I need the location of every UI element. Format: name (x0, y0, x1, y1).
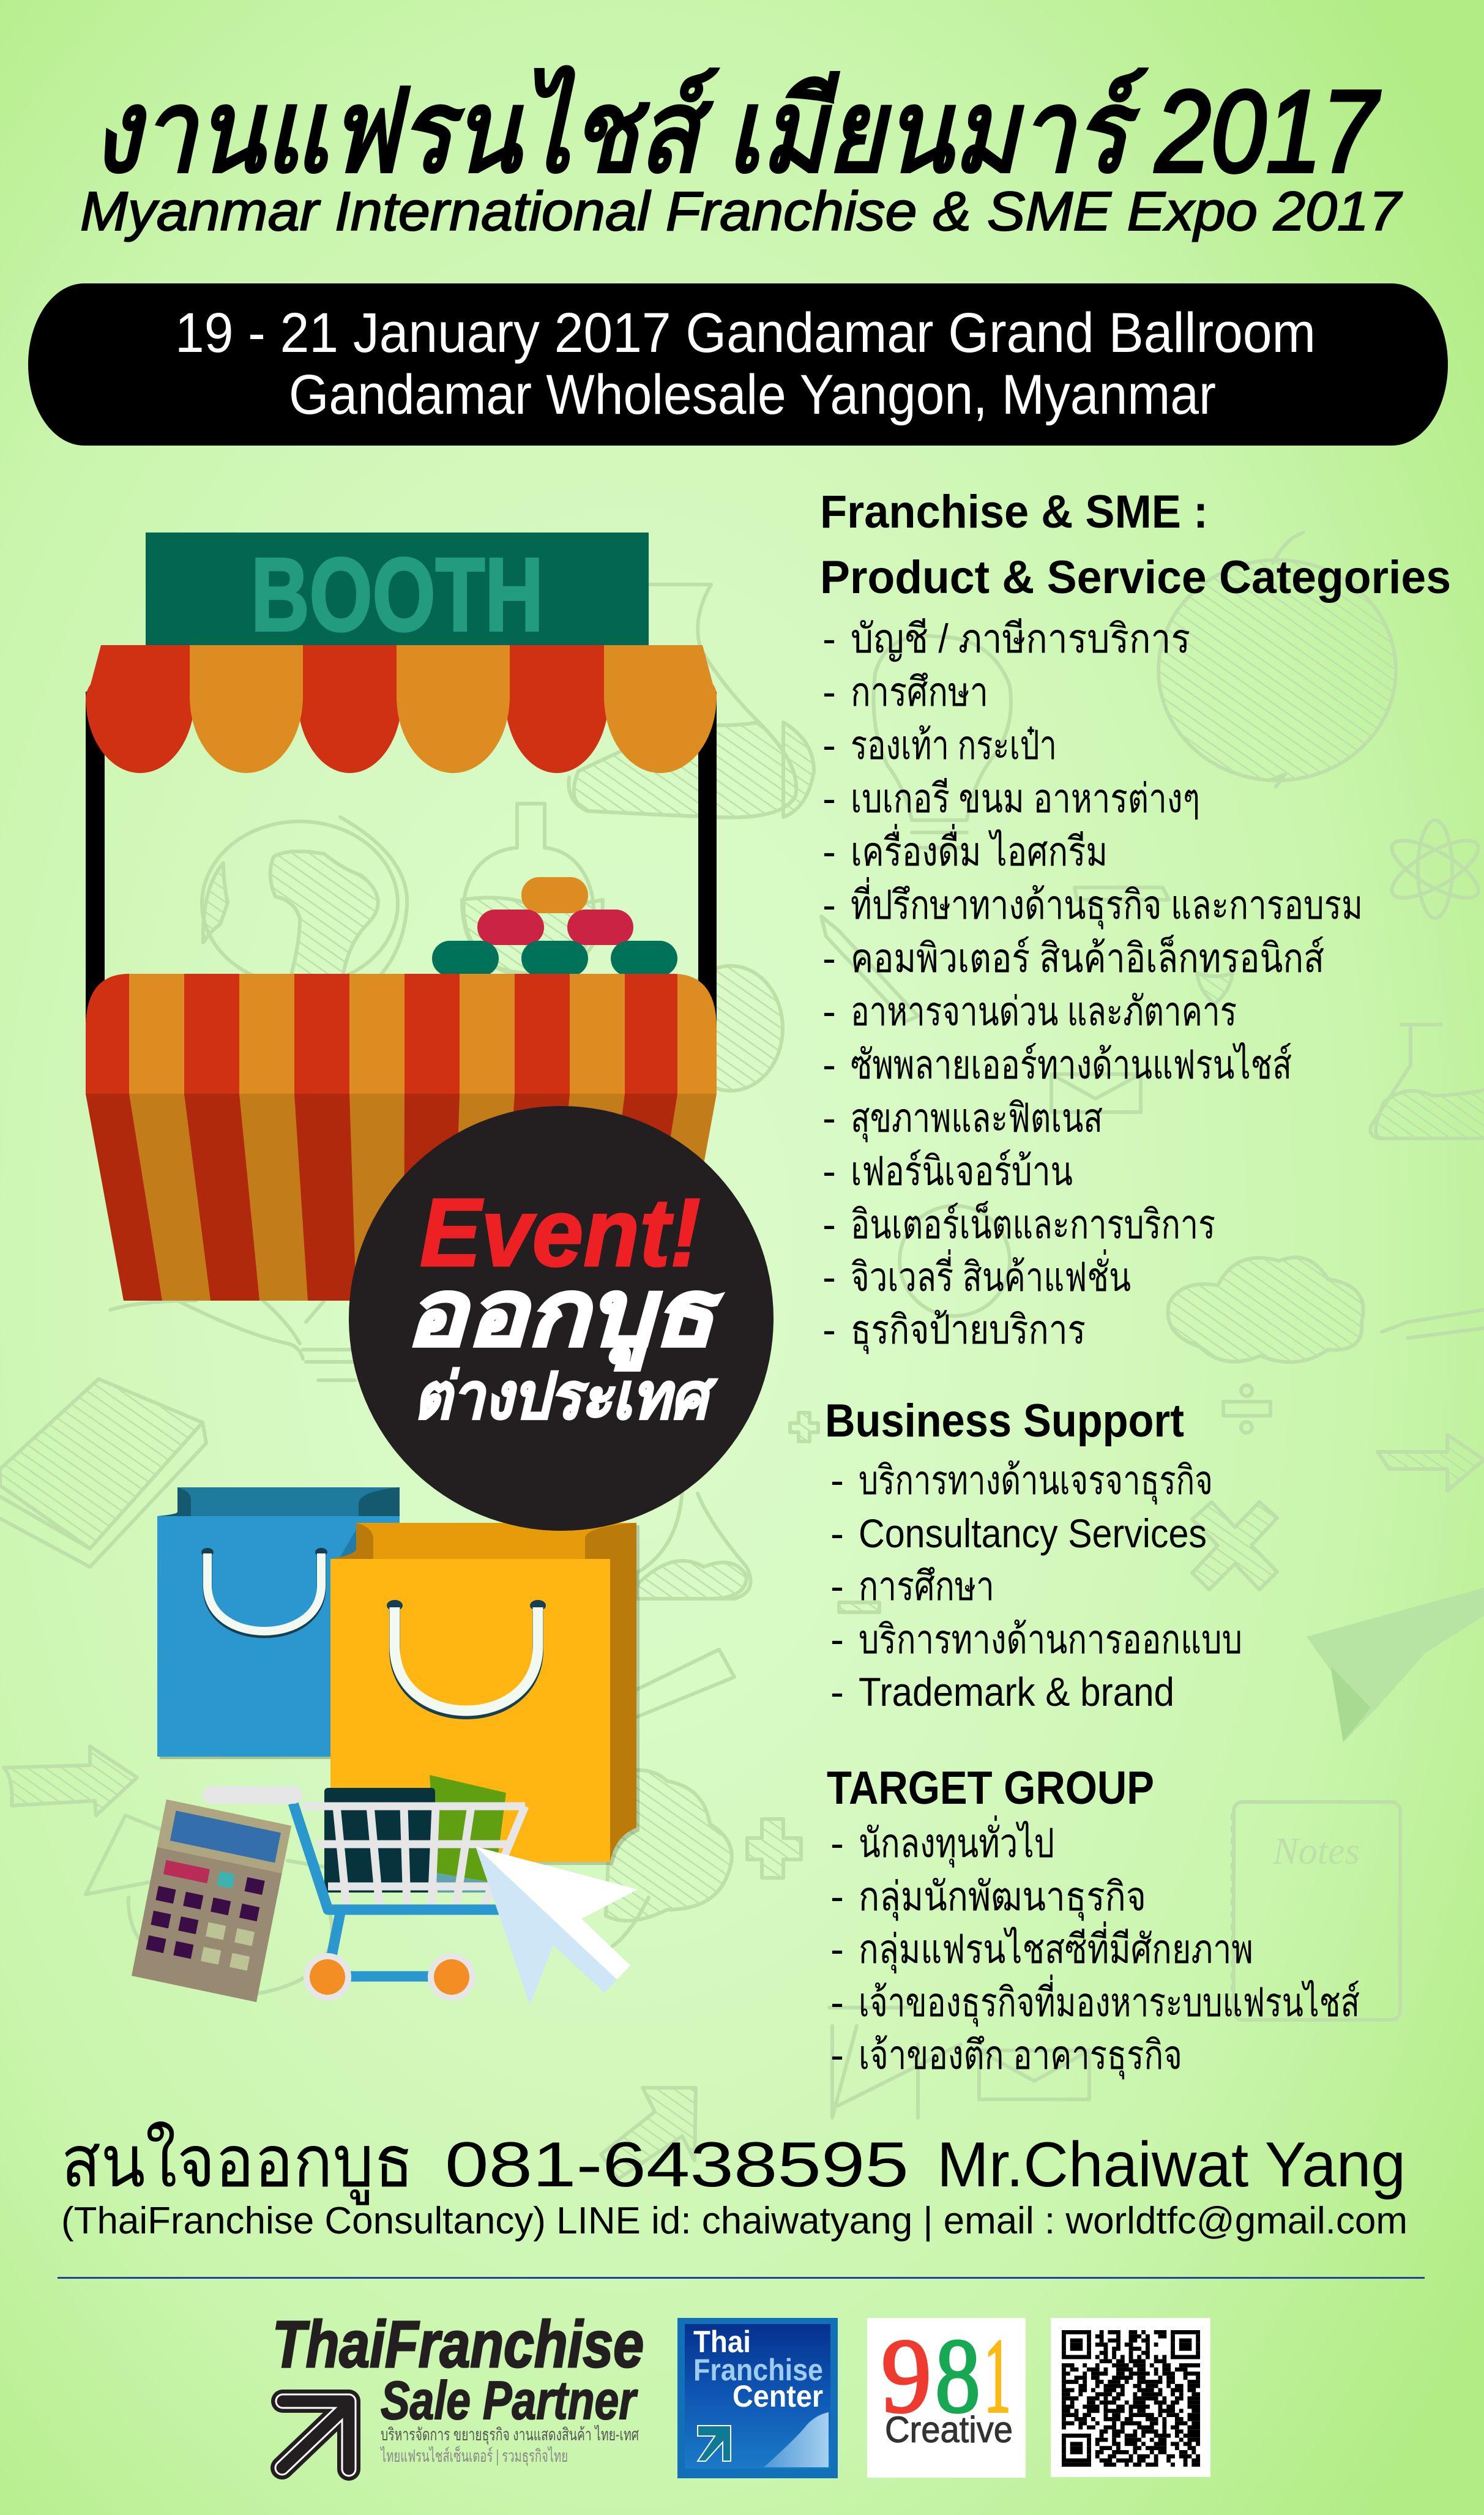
logo: Thai Franchise Center: Franchise (693, 2353, 823, 2387)
list: product and service categories: - (822, 988, 836, 1034)
list: target group: เจ้าของธุรกิจที่มองหาระบบแฟรนไชส์ (859, 1975, 1360, 2027)
mouse cursor arrow (475, 1847, 638, 2005)
list: target group: กลุ่มแฟรนไชสซีที่มีศักยภาพ (859, 1921, 1253, 1974)
list: business support: บริการทางด้านการออกแบบ (859, 1616, 1242, 1662)
blue bag (157, 1487, 400, 1759)
counter front stripes (86, 1094, 717, 1301)
logo arrow (282, 2401, 349, 2469)
heading: target group: TARGET GROUP (827, 1762, 1154, 1814)
background doodles (0, 533, 1484, 2179)
list: business support: การศึกษา (859, 1563, 994, 1609)
booth posts (86, 692, 717, 1053)
list: product and service categories (822, 616, 1363, 1355)
logo: ThaiFranchise Sale Partner: ไทยแฟรนไชส์เซ็นเตอร์ | รวมธุรกิจไทย (380, 2445, 568, 2467)
logo: 981 Creative: 1 (984, 2317, 1011, 2435)
heading: business support: Business Support (825, 1395, 1184, 1447)
logo: ThaiFranchise Sale Partner: Sale Partner (381, 2370, 638, 2431)
shopping cart (203, 1775, 525, 2001)
background doodles: Notes (1272, 1831, 1360, 1872)
list: business support: - (830, 1563, 844, 1609)
list: product and service categories: อาหารจานด่วน และภัตาคาร (851, 988, 1237, 1034)
contact line: 081-6438595 (445, 2129, 909, 2200)
list: business support: - (830, 1616, 844, 1662)
list: product and service categories: - (822, 1307, 836, 1352)
contact line (61, 2121, 1406, 2205)
QR code (1051, 2318, 1210, 2477)
list: product and service categories: คอมพิวเตอร์ สินค้าอิเล็กทรอนิกส์ (851, 934, 1324, 981)
list: product and service categories: เบเกอรี ขนม อาหารต่างๆ (851, 775, 1200, 821)
logo: Thai Franchise Center: Thai (693, 2325, 751, 2359)
list: business support: - (830, 1457, 844, 1503)
list: product and service categories: - (822, 882, 836, 927)
list: target group: กลุ่มนักพัฒนาธุรกิจ (859, 1874, 1146, 1921)
booth illustration (86, 533, 717, 1301)
list: product and service categories: - (822, 722, 836, 768)
list: target group: เจ้าของตึก อาคารธุรกิจ (859, 2032, 1182, 2080)
list: product and service categories: สุขภาพและฟิตเนส (851, 1095, 1103, 1143)
list: business support: Consultancy Services (859, 1511, 1207, 1556)
list: business support: บริการทางด้านเจรจาธุรกิจ (859, 1457, 1213, 1505)
list: product and service categories: - (822, 935, 836, 981)
event badge: Event! (420, 1179, 701, 1287)
logo: ThaiFranchise Sale Partner (272, 2307, 644, 2469)
list: product and service categories: เฟอร์นิเจอร์บ้าน (851, 1148, 1073, 1194)
awning (86, 645, 717, 773)
list: product and service categories: - (822, 1201, 836, 1247)
shopping bags (157, 1487, 639, 1865)
list: product and service categories: - (822, 829, 836, 874)
list: target group: นักลงทุนทั่วไป (859, 1815, 1054, 1868)
list: business support: Trademark & brand (859, 1669, 1174, 1714)
list: product and service categories: - (822, 1095, 836, 1140)
list: product and service categories: - (822, 616, 836, 661)
date and venue banner: 19 - 21 January 2017 Gandamar Grand Ballroom (175, 302, 1316, 364)
heading: product and service categories: Franchise & SME : (820, 486, 1208, 538)
heading: product and service categories: Product & Service Categories (820, 551, 1451, 604)
contact line: Mr.Chaiwat Yang (937, 2129, 1406, 2200)
list: target group (830, 1815, 1360, 2080)
list: product and service categories: ที่ปรึกษาทางด้านธุรกิจ และการอบรม (851, 877, 1363, 930)
subtitle: Myanmar International Franchise & SME Expo 2017 (80, 181, 1403, 242)
contact line: สนใจออกบูธ (61, 2121, 414, 2205)
list: business support: - (830, 1669, 844, 1714)
logo: Thai Franchise Center: Center (733, 2379, 823, 2413)
list: product and service categories: - (822, 669, 836, 714)
list: business support: - (830, 1511, 844, 1556)
yellow bag (330, 1523, 639, 1865)
event badge (349, 1106, 774, 1531)
counter top stripes (86, 974, 717, 1094)
list: product and service categories: บัญชี / ภาษีการบริการ (851, 616, 1190, 662)
list: target group: - (830, 1874, 844, 1919)
heading: product and service categories (820, 486, 1451, 604)
list: target group: - (830, 2032, 844, 2077)
list: product and service categories: ธุรกิจป้ายบริการ (851, 1307, 1086, 1355)
list: product and service categories: อินเตอร์เน็ตและการบริการ (851, 1200, 1215, 1247)
booth sign: BOOTH (251, 537, 543, 653)
list: product and service categories: การศึกษา (851, 669, 988, 714)
list: target group: - (830, 1820, 844, 1866)
list: product and service categories: รองเท้า กระเป๋า (851, 722, 1057, 768)
logo: Thai Franchise Center (677, 2318, 838, 2478)
list: target group: - (830, 1926, 844, 1971)
date and venue banner (28, 283, 1448, 446)
logo: ThaiFranchise Sale Partner: ThaiFranchise (272, 2307, 644, 2381)
goods stacked on counter (432, 877, 677, 976)
list: target group: - (830, 1979, 844, 2025)
event badge: ต่างประเทศ (414, 1361, 717, 1432)
list: product and service categories: ซัพพลายเออร์ทางด้านแฟรนไชส์ (851, 1042, 1292, 1087)
list: product and service categories: - (822, 1254, 836, 1299)
list: product and service categories: - (822, 775, 836, 821)
calculator (132, 1799, 291, 2002)
date and venue banner: Gandamar Wholesale Yangon, Myanmar (289, 364, 1216, 426)
logo: 981 Creative: Creative (885, 2409, 1013, 2450)
list: business support (830, 1457, 1242, 1714)
list: product and service categories: - (822, 1042, 836, 1087)
logo: 981 Creative: 9 (881, 2317, 931, 2435)
contact details: (ThaiFranchise Consultancy) LINE id: chaiwatyang | email : worldtfc@gmail.com (61, 2200, 1408, 2242)
logo: 981 Creative: 8 (935, 2317, 980, 2435)
logo: 981 Creative (867, 2317, 1026, 2478)
event badge: ออกบูธ (405, 1261, 723, 1370)
list: product and service categories: - (822, 1148, 836, 1194)
list: product and service categories: เครื่องดื่ม ไอศกรีม (851, 824, 1108, 874)
logo: ThaiFranchise Sale Partner: บริหารจัดการ ขยายธุรกิจ งานแสดงสินค้า ไทย-เทศ (381, 2425, 639, 2445)
divider (58, 2277, 1425, 2279)
list: product and service categories: จิวเวลรี่ สินค้าแฟชั่น (851, 1249, 1131, 1299)
